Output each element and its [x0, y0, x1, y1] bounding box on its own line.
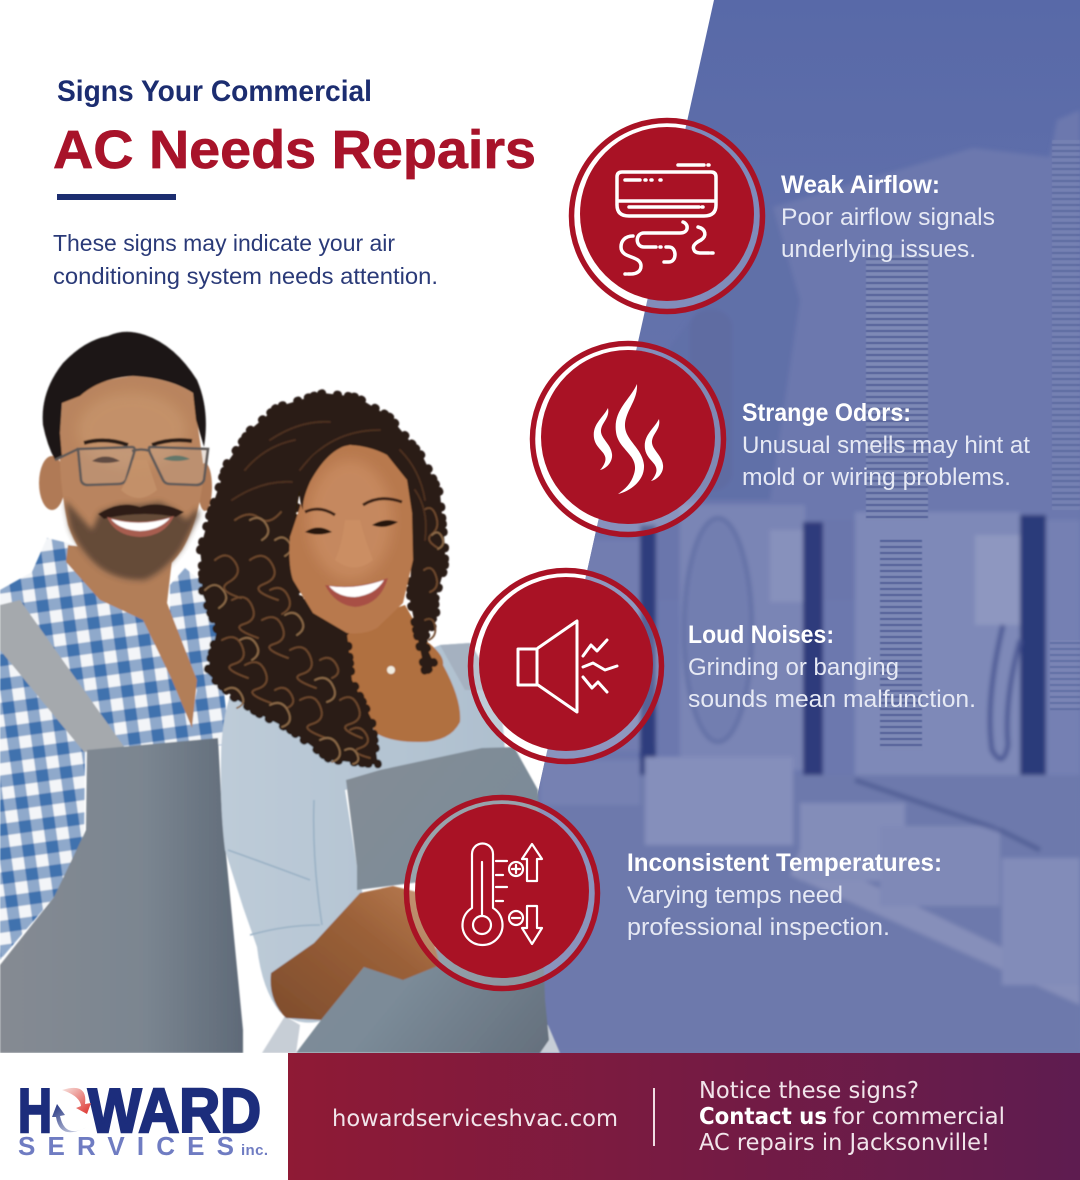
text: weak airflow: underlying issues.: [781, 236, 976, 263]
woman: arm and fist: [271, 886, 440, 1020]
illustration: two smiling technicians: [0, 332, 560, 1053]
man: face: [60, 376, 204, 582]
woman: lower shirt: [262, 1016, 560, 1053]
badge: loud noises icon: [470, 570, 662, 762]
woman: eyes: [305, 520, 398, 534]
man: apron strap: [0, 600, 125, 752]
AC unit vents: [866, 140, 1080, 750]
woman: hair: [200, 393, 445, 765]
logo: Howard Services: [18, 1077, 268, 1161]
logo: Howard Services: SERVICES: [18, 1131, 234, 1161]
text: weak airflow: [781, 171, 995, 263]
text: strange odors: mold or wiring problems.: [742, 464, 1011, 491]
text: inconsistent temperatures: Varying temps need: [627, 882, 843, 909]
woman: shoulder shade: [440, 643, 497, 690]
text: inconsistent temperatures: [627, 849, 942, 941]
footer band: [0, 1053, 1080, 1180]
icon: odor waves: [594, 384, 663, 494]
man: eyes: [92, 456, 120, 463]
woman: smile: [325, 578, 388, 607]
woman: necklace: [387, 666, 395, 674]
man: nose: [121, 460, 157, 498]
icon: speaker with sound: [518, 621, 617, 712]
icon: thermometer with arrows: [462, 844, 542, 945]
intro text: [53, 230, 438, 289]
intro text: conditioning system needs attention.: [53, 263, 438, 289]
text: weak airflow: Weak Airflow:: [781, 171, 940, 199]
title rule: [57, 194, 176, 200]
woman: sleeve folds: [228, 800, 322, 935]
woman: apron: [296, 747, 549, 1053]
icon: air conditioner and airflow: [617, 165, 716, 274]
text: loud noises: [688, 621, 976, 713]
call to action: Notice these signs?: [699, 1078, 919, 1104]
text: inconsistent temperatures: Inconsistent Temperatures:: [627, 849, 942, 877]
text: strange odors: Strange Odors:: [742, 399, 911, 427]
text: weak airflow: Poor airflow signals: [781, 204, 995, 231]
text: strange odors: Unusual smells may hint at: [742, 432, 1030, 459]
man: eyebrows: [84, 440, 192, 445]
woman: nose: [335, 520, 373, 568]
man: beard: [65, 500, 199, 580]
man: hair: [43, 332, 206, 460]
woman: face: [289, 445, 413, 633]
woman: eyebrows: [305, 499, 402, 515]
text: loud noises: sounds mean malfunction.: [688, 686, 976, 713]
woman: shirt: [221, 643, 505, 1023]
text: strange odors: [742, 399, 1030, 491]
man: glasses: [55, 447, 208, 485]
logo: Howard Services: inc.: [241, 1142, 268, 1159]
woman: curls: [205, 422, 443, 764]
title: small heading: Signs Your Commercial: [57, 75, 372, 108]
woman: neck and chest: [345, 605, 460, 742]
call to action: Contact us: [699, 1104, 827, 1130]
title: main heading: AC Needs Repairs: [53, 120, 536, 180]
website: howardserviceshvac.com: [332, 1106, 618, 1132]
logo arrows: [62, 1088, 91, 1114]
badge: weak airflow icon: [572, 120, 762, 312]
text: loud noises: Loud Noises:: [688, 621, 834, 649]
man: shirt: [0, 538, 230, 960]
man: smile: [107, 516, 174, 537]
divider: [653, 1088, 655, 1146]
man: apron body: [0, 738, 243, 1053]
woman: hairline curl: [300, 444, 355, 510]
badge: strange odors icon: [532, 344, 724, 534]
text: inconsistent temperatures: professional inspection.: [627, 914, 890, 941]
text: loud noises: Grinding or banging: [688, 654, 899, 681]
panel: blue AC units photo: [470, 0, 1080, 1053]
logo: Howard Services: WARD: [88, 1077, 261, 1146]
intro text: These signs may indicate your air: [53, 230, 395, 256]
call to action: AC repairs in Jacksonville!: [699, 1130, 990, 1156]
man: neck: [66, 545, 197, 728]
call to action: for commercial: [833, 1104, 1005, 1130]
man: ears: [39, 456, 212, 511]
logo: Howard Services: H: [18, 1077, 52, 1146]
call to action: [699, 1078, 1005, 1156]
badge: inconsistent temperatures icon: [406, 798, 598, 988]
